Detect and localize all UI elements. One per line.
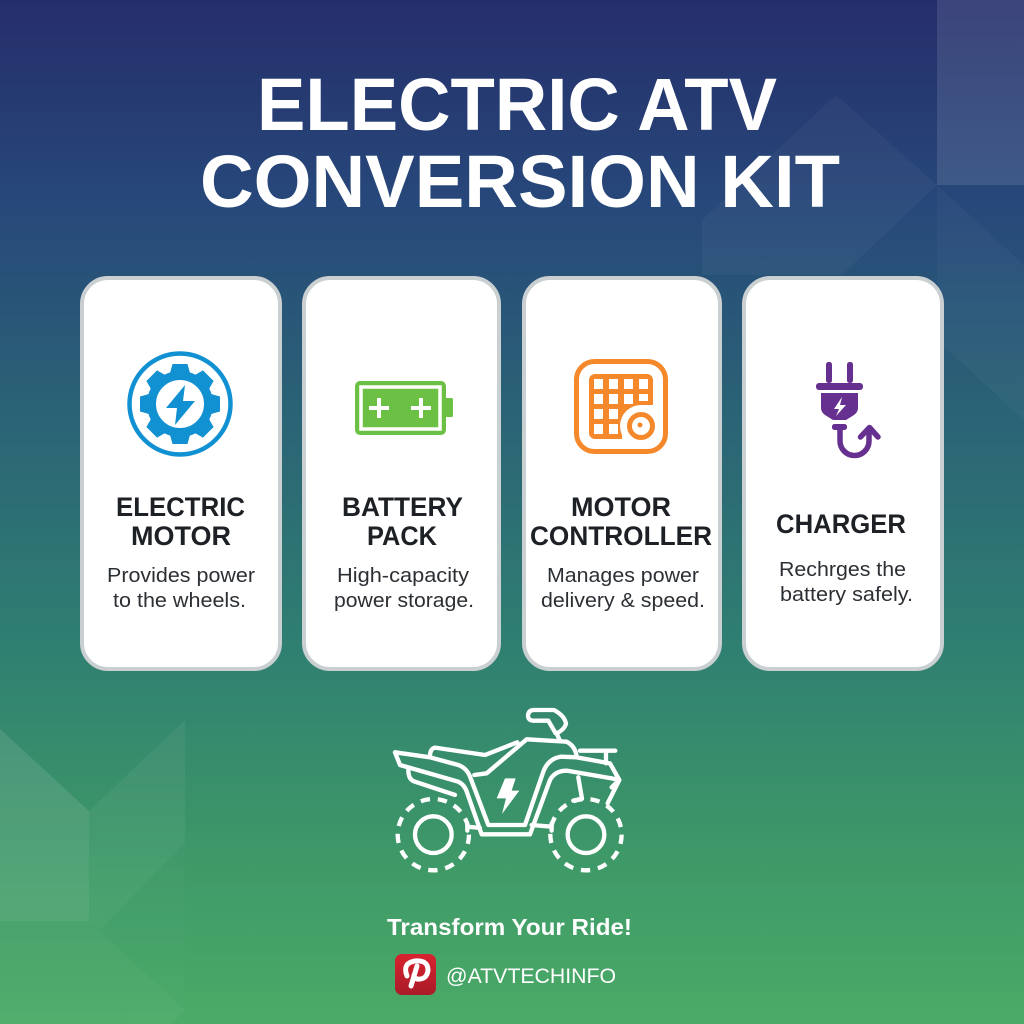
heading: charger: CHARGER xyxy=(776,509,906,539)
panel: battery pack xyxy=(304,278,499,669)
text: motor description: Provides power xyxy=(107,565,255,587)
icon: electric ATV xyxy=(395,710,622,870)
rear wheel xyxy=(415,816,452,853)
heading: battery pack: BATTERY xyxy=(342,492,463,522)
icon: gear with lightning bolt xyxy=(130,354,230,454)
icon: controller xyxy=(576,362,666,452)
front rack and fender xyxy=(577,751,619,803)
axles xyxy=(467,823,552,831)
panel: electric motor xyxy=(82,278,280,669)
tagline: Transform Your Ride! xyxy=(387,914,632,940)
title xyxy=(200,63,840,223)
text: controller description: Manages power xyxy=(547,565,699,587)
social handle xyxy=(395,954,616,995)
heading: motor controller: MOTOR xyxy=(571,492,671,522)
panel: charger xyxy=(744,278,942,669)
title: CONVERSION KIT xyxy=(200,140,840,223)
panel: motor controller xyxy=(524,278,720,669)
bolt xyxy=(497,778,519,814)
text: battery description: High-capacity xyxy=(337,565,469,587)
rear fender and frame xyxy=(395,739,577,825)
text: charger description: battery safely. xyxy=(780,584,913,606)
title: ELECTRIC ATV xyxy=(257,63,777,146)
icon: battery xyxy=(355,381,453,435)
text: controller description: delivery & speed. xyxy=(541,590,705,612)
text: battery description xyxy=(334,565,474,612)
text: battery description: power storage. xyxy=(334,590,474,612)
heading: battery pack xyxy=(342,492,463,551)
icon: pinterest xyxy=(395,954,436,995)
icon: plug xyxy=(816,362,878,456)
text: controller description xyxy=(541,565,705,612)
handle text: @ATVTECHINFO xyxy=(446,965,616,988)
text: motor description: to the wheels. xyxy=(113,590,246,612)
heading: electric motor: ELECTRIC xyxy=(116,492,245,522)
heading: motor controller xyxy=(530,492,712,551)
text: charger description: Rechrges the xyxy=(779,559,906,581)
heading: motor controller: CONTROLLER xyxy=(530,521,712,551)
text: motor description xyxy=(107,565,255,612)
heading: electric motor: MOTOR xyxy=(131,521,231,551)
front wheel xyxy=(568,816,604,853)
heading: battery pack: PACK xyxy=(367,521,437,551)
seat xyxy=(430,742,517,757)
heading: electric motor xyxy=(116,492,245,551)
handlebar xyxy=(528,710,566,739)
text: charger description xyxy=(779,559,913,606)
